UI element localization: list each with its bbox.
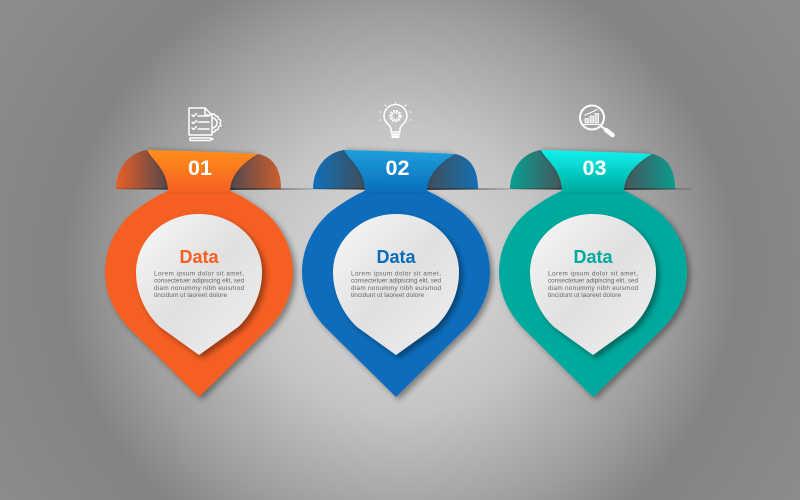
left wing <box>510 150 584 190</box>
tab band <box>344 150 455 192</box>
tab band <box>541 150 652 192</box>
left wing <box>313 150 387 190</box>
right wing <box>604 154 675 190</box>
right wing <box>210 154 281 190</box>
left wing underline <box>116 188 170 190</box>
body text: consectetuer adipiscing elit, sed <box>154 278 244 284</box>
inner card <box>530 214 656 355</box>
icon: magnifier with bar chart <box>580 106 612 135</box>
body text: consectetuer adipiscing elit, sed <box>351 278 441 284</box>
body text <box>154 270 244 299</box>
left wing underline <box>313 188 367 190</box>
body text: tincidunt ut laoreet dolore <box>154 292 227 299</box>
body text: tincidunt ut laoreet dolore <box>351 292 424 299</box>
shadow line <box>425 188 510 190</box>
body text: diam nonummy nibh euismod <box>548 285 638 292</box>
body text: consectetuer adipiscing elit, sed <box>548 278 638 284</box>
outer pin <box>499 189 687 397</box>
tab band <box>147 150 258 192</box>
body text: Lorem ipsum dolor sit amet, <box>548 270 638 278</box>
body text: Lorem ipsum dolor sit amet, <box>351 270 441 278</box>
body text: tincidunt ut laoreet dolore <box>548 292 621 299</box>
panel: step 03 teal <box>499 106 692 397</box>
body text: Lorem ipsum dolor sit amet, <box>154 270 244 278</box>
icon: checklist document with gear <box>189 108 221 140</box>
body text <box>351 270 441 299</box>
outer pin <box>105 189 293 397</box>
inner card <box>333 214 459 355</box>
shadow line <box>622 188 692 190</box>
panel: step 02 blue <box>302 102 510 397</box>
number: 03 <box>583 156 606 180</box>
right wing <box>407 154 478 190</box>
body text: diam nonummy nibh euismod <box>154 285 244 292</box>
body text: diam nonummy nibh euismod <box>351 285 441 292</box>
left wing underline <box>510 188 564 190</box>
shadow line <box>228 188 313 190</box>
heading: Data <box>376 247 416 267</box>
number: 02 <box>386 156 409 180</box>
heading: Data <box>573 247 613 267</box>
inner card <box>136 214 262 355</box>
left wing <box>116 150 190 190</box>
panel: step 01 orange <box>105 108 313 397</box>
icon: light bulb with gear <box>380 102 411 137</box>
number: 01 <box>188 156 212 180</box>
heading: Data <box>179 247 219 267</box>
outer pin <box>302 189 490 397</box>
body text <box>548 270 638 299</box>
